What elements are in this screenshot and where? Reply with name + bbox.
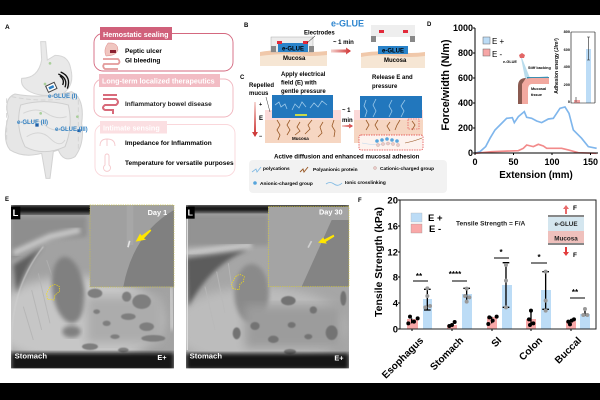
legend: polyanionic protein: Polyanionic protein <box>313 167 358 173</box>
bottom black band <box>0 383 600 400</box>
text: temperature: Temperature for versatile purposes <box>125 160 234 167</box>
y ticks: 200 <box>458 123 473 133</box>
icon: digestive tract <box>5 42 82 178</box>
left tissue <box>265 95 341 143</box>
y ticks: 0 <box>468 148 473 158</box>
label E: E <box>5 197 9 203</box>
legend: anionic: Anionic-charged group <box>260 181 313 187</box>
L tag <box>11 207 20 219</box>
heading <box>100 121 167 134</box>
left tissue: Mucosa <box>292 136 309 141</box>
panel D: force chart <box>427 22 598 181</box>
legend E-: E - <box>492 50 503 59</box>
text: active diffusion: Active diffusion and enhanced mucosal adhesion <box>274 154 420 160</box>
icon: intestine <box>103 95 118 114</box>
curves <box>475 107 597 153</box>
right tissue <box>354 96 423 150</box>
y ticks: 20 <box>387 196 398 206</box>
data points <box>406 263 589 328</box>
peel schematic: tissue <box>531 93 542 97</box>
legend E- <box>483 49 503 59</box>
inset bar chart <box>554 30 595 104</box>
text: peptic ulcer: Peptic ulcer <box>125 48 162 55</box>
text: repelled mucus: mucus <box>249 91 269 97</box>
text: Day 1: Day 1 <box>148 208 167 217</box>
panel F: tensile strength chart <box>358 196 596 381</box>
inset bar chart: Adhesion energy (J/m²) <box>554 38 560 94</box>
label e-GLUE (III): e-GLUE (III) <box>55 127 88 133</box>
schematic: tensile test: F <box>573 252 577 259</box>
icon: stomach and intestine <box>103 43 120 69</box>
schematic: tensile test: F <box>573 205 577 212</box>
label F: F <box>358 198 362 204</box>
y ticks: 600 <box>458 73 473 83</box>
y title: Force/width (N/m) <box>440 39 452 131</box>
x ticks: 100 <box>544 157 560 167</box>
x ticks: 0 <box>472 157 478 167</box>
category labels: Esophagus <box>380 335 426 381</box>
significance marks: **** <box>449 270 462 279</box>
text: apply field: gentle pressure <box>281 89 326 95</box>
arrow: 1 min second: ~ 1 <box>342 108 351 114</box>
inset bar chart: 200 <box>564 83 570 87</box>
y ticks: 1000 <box>453 23 473 33</box>
heading <box>100 27 172 40</box>
x ticks <box>472 157 598 167</box>
arrow: electric field <box>252 97 270 140</box>
arrow: 1 min second <box>342 108 353 128</box>
panel A: gut illustration <box>5 24 88 178</box>
electrodes label: Electrodes <box>304 30 335 36</box>
y ticks: 12 <box>387 248 398 258</box>
legend: ionic crosslinking: Ionic crosslinking <box>345 180 386 186</box>
top black band <box>0 0 600 15</box>
y ticks: 800 <box>458 48 473 58</box>
x ticks: 50 <box>508 157 519 167</box>
L tag: L <box>188 208 194 218</box>
inset bar chart: 400 <box>564 65 570 69</box>
left device: e-GLUE <box>282 46 304 52</box>
icon: thermometer <box>104 154 111 171</box>
y title: Tensile Strength (kPa) <box>373 207 385 317</box>
L tag <box>186 207 195 219</box>
text: GI bleeding: GI bleeding <box>125 58 160 64</box>
arrow: 1 min <box>331 40 354 54</box>
schematic: tensile test: e-GLUE <box>554 221 578 228</box>
y ticks: 4 <box>393 298 399 310</box>
x title: Extension (mm) <box>499 170 573 181</box>
category labels: Colon <box>517 335 545 363</box>
y ticks: 400 <box>458 98 473 108</box>
right device: Mucosa <box>384 58 407 64</box>
significance marks: * <box>537 253 541 262</box>
text: impedance: Impedance for Inflammation <box>125 140 212 147</box>
label B: B <box>244 23 249 29</box>
inset day 1 <box>90 205 174 287</box>
significance marks: ** <box>416 272 423 281</box>
panel C: mechanism <box>240 72 447 193</box>
legend <box>249 160 447 193</box>
text: inflammatory bowel disease: Inflammatory bowel disease <box>125 101 212 108</box>
text: release: pressure <box>372 84 398 90</box>
y ticks: 16 <box>387 222 398 232</box>
text: apply field: Apply electrical <box>281 72 326 78</box>
label D: D <box>427 22 432 28</box>
legend E+: E + <box>492 37 505 46</box>
peel schematic: Stiff backing <box>528 66 551 70</box>
axes <box>473 28 598 155</box>
axes frame <box>400 200 596 329</box>
legend: polycations <box>252 166 290 172</box>
category labels: SI <box>490 335 504 350</box>
arrow: 1 min: ~ 1 min <box>333 40 354 46</box>
text: release: Release E and <box>372 75 413 81</box>
panel: hemostatic sealing: Hemostatic sealing <box>103 30 169 39</box>
inset bar chart: 600 <box>564 48 570 52</box>
heading <box>99 74 220 87</box>
schematic: tensile test <box>548 205 584 259</box>
inset bar chart: 800 <box>564 30 570 34</box>
text: Day 30: Day 30 <box>319 208 343 217</box>
marker outline <box>232 275 244 290</box>
text: apply field: field (E) with <box>281 80 317 86</box>
y ticks: 0 <box>393 324 398 336</box>
panel: hemostatic sealing <box>94 27 233 71</box>
inset day 30 <box>268 207 349 287</box>
marker outline <box>47 285 59 300</box>
bars <box>407 285 590 329</box>
legend E+ <box>483 37 505 46</box>
y ticks <box>453 23 473 158</box>
x ticks: 150 <box>583 157 598 167</box>
legend: polyanionic protein <box>300 167 358 173</box>
significance marks: * <box>499 248 503 257</box>
L tag: L <box>13 208 19 218</box>
arrow: 1 min second: min <box>342 118 353 124</box>
significance marks: ** <box>572 288 579 297</box>
panel: long-term therapeutics <box>94 74 233 117</box>
legend <box>411 213 443 235</box>
panel: intimate sensing: Intimate sensing <box>103 124 160 132</box>
panel E: day 1 x-ray <box>0 197 174 371</box>
peel schematic: Mucosal <box>531 87 546 91</box>
arrow: electric field: + <box>259 102 262 108</box>
right device: e-GLUE <box>382 48 404 54</box>
panel B: e-GLUE device <box>244 18 425 68</box>
legend: E - <box>429 224 441 235</box>
curve: E+ <box>475 107 597 153</box>
text: E+: E+ <box>334 354 343 363</box>
text: repelled mucus: Repelled <box>249 83 274 89</box>
schematic: tensile test: Mucosa <box>554 236 578 242</box>
panel E: day 30 x-ray <box>172 205 349 370</box>
legend: ionic crosslinking <box>326 180 386 186</box>
text: Stomach: Stomach <box>190 351 222 360</box>
peel schematic <box>503 53 551 104</box>
curve: E- <box>475 144 597 153</box>
arrow: electric field: − <box>259 134 262 140</box>
title e-GLUE: e-GLUE <box>331 18 364 28</box>
legend: polycations: polycations <box>263 166 290 172</box>
category labels: Stomach <box>428 335 466 373</box>
label A: A <box>5 24 10 31</box>
arrow: electric field: E <box>259 116 263 122</box>
label C: C <box>240 75 245 81</box>
significance marks <box>413 248 585 298</box>
label e-GLUE (II): e-GLUE (II) <box>17 120 48 126</box>
panel: intimate sensing <box>95 121 235 176</box>
left device <box>260 36 327 66</box>
text: E+: E+ <box>157 353 166 362</box>
category labels: Buccal <box>553 335 584 366</box>
peel schematic: e-GLUE <box>503 60 517 64</box>
text: Stomach: Stomach <box>15 351 47 360</box>
inset bar chart: 0 <box>568 100 570 104</box>
legend: cationic: Cationic-charged group <box>380 166 434 172</box>
formula: Tensile Strength = F/A <box>456 220 526 228</box>
right device <box>361 25 425 68</box>
y ticks: 8 <box>393 272 398 284</box>
label e-GLUE (I): e-GLUE (I) <box>48 94 77 100</box>
icon: gauge <box>100 139 115 146</box>
legend: E + <box>428 213 443 224</box>
category labels <box>380 335 584 381</box>
left device: Mucosa <box>283 56 306 62</box>
panel: long-term therapeutics: Long-term localized therapeutics <box>102 76 215 86</box>
y ticks <box>387 196 399 336</box>
